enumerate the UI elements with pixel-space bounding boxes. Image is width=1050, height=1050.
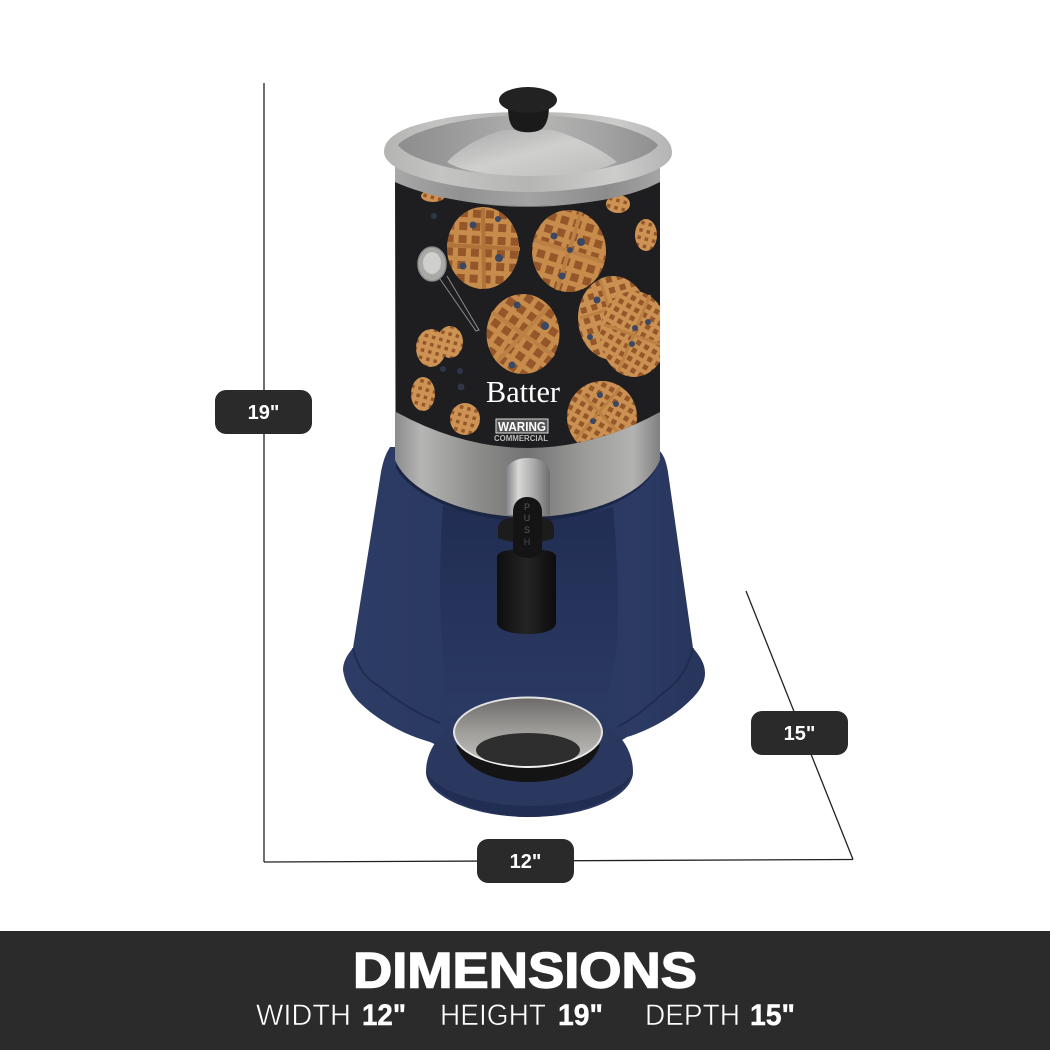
- heading: dimensions: DIMENSIONS: [353, 942, 697, 998]
- waffle 3: [486, 294, 560, 374]
- depth text: DEPTH: [645, 999, 740, 1032]
- waffle 9: [411, 377, 435, 411]
- height text: HEIGHT: [440, 999, 546, 1032]
- waffle 11: [635, 219, 657, 251]
- waffle 2: [532, 210, 606, 292]
- navy base: [343, 447, 705, 760]
- depth label pill: 15": [784, 723, 815, 745]
- depth dimension line: [746, 591, 853, 860]
- height label pill: 19": [248, 402, 279, 424]
- WARING COMMERCIAL logo: [494, 419, 548, 443]
- flange ridge: [353, 648, 693, 727]
- drip tray foot: [426, 724, 633, 817]
- front recessed panel: [440, 505, 618, 716]
- depth text: [645, 999, 795, 1032]
- waffle 1: [447, 207, 520, 289]
- PUSH embossed text: P: [524, 502, 530, 512]
- waffle 5: [600, 291, 660, 377]
- waffle 4: [578, 276, 640, 360]
- height dimension line: [263, 83, 265, 862]
- waffle label wrap: [395, 182, 668, 453]
- width label pill: 12": [510, 851, 541, 873]
- drip bowl: [453, 696, 603, 782]
- label text: Batter: Batter: [486, 374, 561, 409]
- width text: 12": [362, 999, 406, 1032]
- width dimension line: [264, 860, 853, 862]
- icon: sifter: [418, 247, 479, 331]
- lid knob: [499, 87, 557, 132]
- push valve: U: [524, 513, 530, 523]
- spout: [505, 458, 550, 515]
- width text: WIDTH: [256, 999, 351, 1032]
- batter dispenser product illustration: [343, 87, 705, 817]
- waffle 7: [437, 326, 463, 358]
- WARING COMMERCIAL logo: WARING: [498, 419, 546, 434]
- footer band: [0, 931, 1050, 1050]
- height label pill: [215, 390, 312, 434]
- waffle 8: [416, 329, 446, 367]
- height text: [440, 999, 603, 1032]
- valve cup: [497, 549, 556, 634]
- push valve: H: [524, 537, 530, 547]
- push valve: [498, 497, 554, 558]
- width label pill: [477, 839, 574, 883]
- WARING COMMERCIAL logo: COMMERCIAL: [494, 434, 548, 443]
- waffle 13: [421, 192, 444, 202]
- loose blueberries: [431, 213, 464, 390]
- depth text: 15": [750, 999, 795, 1032]
- height text: 19": [558, 999, 603, 1032]
- waffle 12: [606, 195, 630, 213]
- lid: [384, 112, 672, 206]
- cradle shadow: [396, 460, 655, 521]
- depth label pill: [751, 711, 848, 755]
- waffle 6: [567, 381, 637, 443]
- waffle 10: [450, 403, 480, 435]
- width text: [256, 999, 406, 1032]
- push valve: S: [524, 525, 530, 535]
- stainless steel cylinder: [395, 170, 660, 517]
